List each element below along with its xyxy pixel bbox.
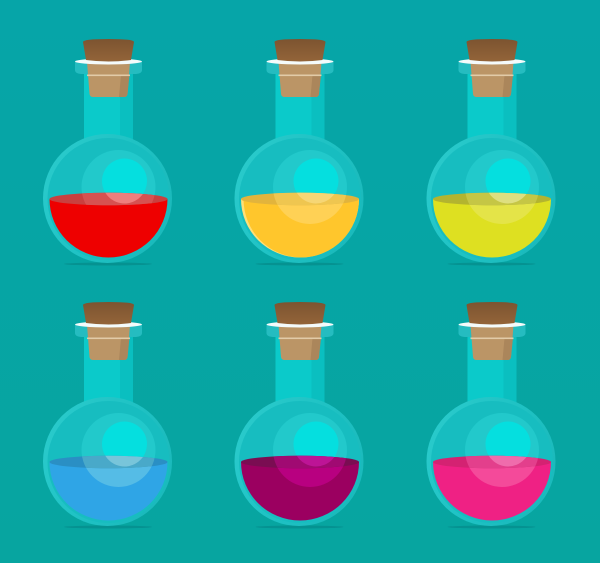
flask: blue	[43, 302, 172, 528]
flask: lime	[426, 39, 556, 266]
flask: pink	[426, 302, 556, 528]
flask: yellow	[234, 39, 364, 266]
illustration: six corked flasks	[43, 39, 556, 528]
flask: purple	[234, 302, 364, 528]
flask: red	[43, 39, 172, 266]
